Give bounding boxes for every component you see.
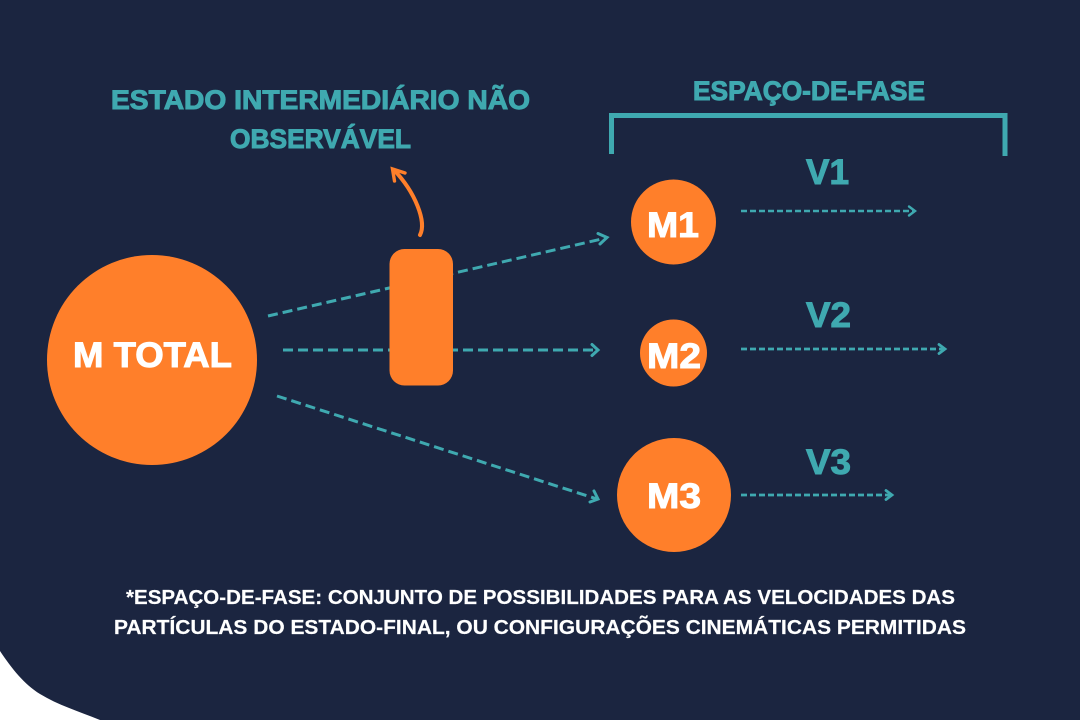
arrow: V3 bbox=[741, 490, 892, 500]
arrow: M total to M3 bbox=[277, 396, 598, 502]
footnote: *ESPAÇO-DE-FASE: CONJUNTO DE POSSIBILIDADES PARA AS VELOCIDADES DAS bbox=[126, 587, 955, 609]
heading: phase space: ESPAÇO-DE-FASE bbox=[693, 76, 925, 106]
arrow: M total to M2 bbox=[283, 344, 598, 356]
circle: M1: M1 bbox=[647, 206, 699, 245]
arrow: M total to M1 bbox=[268, 234, 607, 316]
circle: M3: M3 bbox=[647, 477, 701, 516]
circle: M2 bbox=[640, 320, 707, 386]
circle: M3 bbox=[617, 438, 731, 552]
circle: M1 bbox=[631, 180, 716, 264]
heading: intermediate state: OBSERVÁVEL bbox=[230, 123, 411, 154]
label: V2: V2 bbox=[806, 296, 851, 335]
bracket: phase space bbox=[612, 116, 1005, 156]
footnote bbox=[114, 587, 966, 639]
arrow: V1 bbox=[741, 206, 915, 216]
arrow: V2 bbox=[741, 344, 945, 354]
circle: M2: M2 bbox=[647, 337, 701, 376]
label: V3: V3 bbox=[806, 443, 851, 482]
footnote: PARTÍCULAS DO ESTADO-FINAL, OU CONFIGURAÇÕES CINEMÁTICAS PERMITIDAS bbox=[114, 615, 966, 639]
label: V1: V1 bbox=[806, 153, 849, 192]
circle: M total bbox=[47, 255, 257, 465]
circle: M total: M TOTAL bbox=[73, 336, 232, 375]
arrow: to intermediate state label bbox=[392, 169, 422, 235]
heading: intermediate state: ESTADO INTERMEDIÁRIO NÃO bbox=[111, 84, 530, 115]
white corner shape bbox=[0, 651, 100, 720]
heading: intermediate state bbox=[111, 84, 530, 154]
intermediate state block bbox=[390, 249, 453, 386]
